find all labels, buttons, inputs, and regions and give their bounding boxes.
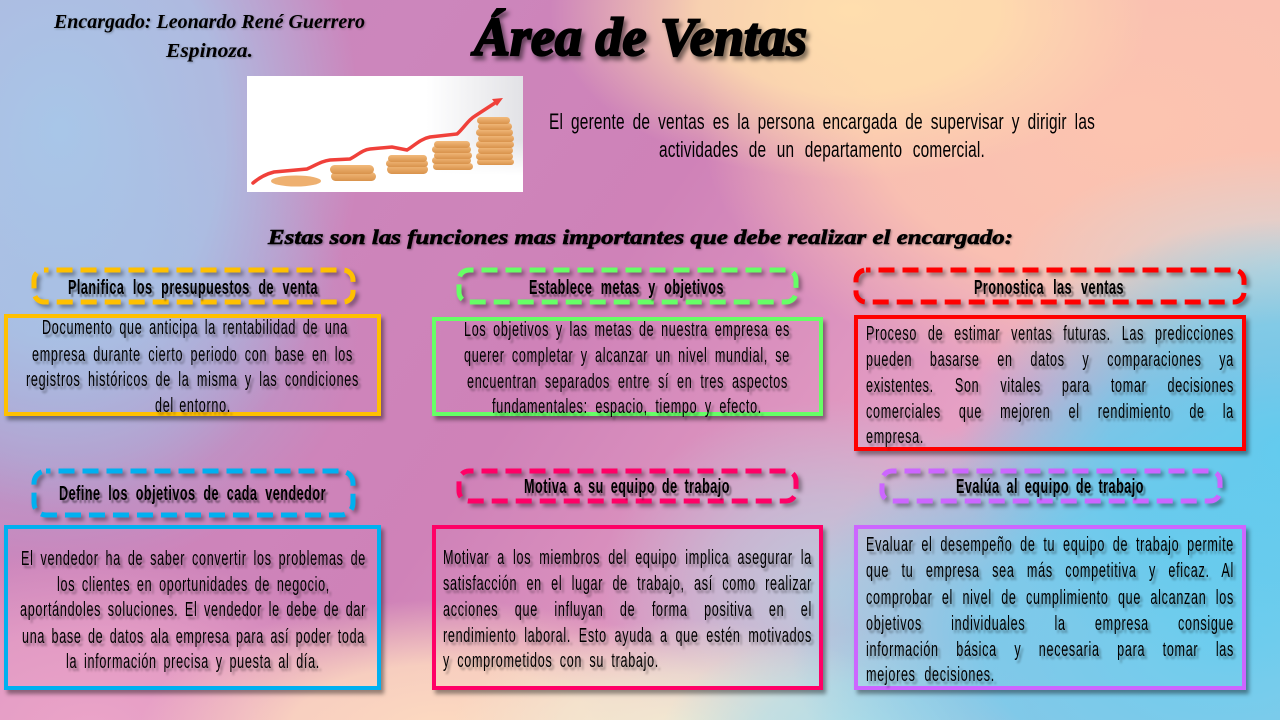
- panel: Planifica los presupuestos de venta: [4, 268, 386, 422]
- panel: Evalúa al equipo de trabajo: [854, 468, 1252, 697]
- heading: presupuestos: Planifica los presupuestos de venta: [68, 277, 318, 299]
- text box: pronostica: empresa.: [866, 426, 924, 448]
- panel: Motiva a su equipo de trabajo: [432, 468, 829, 697]
- intro text: actividades de un departamento comercial.: [659, 137, 985, 162]
- text box: vendedor: aportándoles soluciones. El vendedor le debe de dar: [20, 599, 366, 621]
- title: Área de Ventas: [471, 8, 807, 67]
- text box: pronostica: pueden basarse en datos y comparaciones ya: [866, 349, 1234, 371]
- author credit: [53, 11, 366, 64]
- text box: presupuestos: registros históricos de la misma y las condiciones: [26, 369, 359, 391]
- text box: evalúa: objetivos individuales la empresa consigue: [866, 613, 1234, 635]
- text box: presupuestos: empresa durante cierto periodo con base en los: [32, 344, 353, 366]
- text box: evalúa: comprobar el nivel de cumplimiento que alcanzan los: [866, 587, 1234, 609]
- text box: evalúa: Evaluar el desempeño de tu equipo de trabajo permite: [866, 534, 1234, 556]
- panel: Establece metas y objetivos: [432, 268, 828, 422]
- text box: vendedor: la información precisa y puesta al día.: [66, 651, 320, 673]
- text box: vendedor: una base de datos ala empresa para así poder toda: [22, 626, 365, 648]
- author credit: Encargado: Leonardo René Guerrero: [53, 11, 365, 33]
- text box: vendedor: [4, 525, 381, 690]
- subheading: Estas son las funciones mas importantes que debe realizar el encargado:: [267, 225, 1013, 249]
- heading: evalúa: Evalúa al equipo de trabajo: [956, 476, 1144, 498]
- text box: presupuestos: del entorno.: [155, 395, 231, 417]
- heading: pronostica: Pronostica las ventas: [974, 277, 1124, 299]
- text box: motiva: [432, 525, 823, 690]
- text box: motiva: rendimiento laboral. Esto ayuda a que estén motivados: [443, 625, 812, 647]
- text box: evalúa: mejores decisiones.: [866, 664, 995, 686]
- text box: metas: querer completar y alcanzar un nivel mundial, se: [464, 345, 790, 367]
- heading: evalúa: [880, 468, 1228, 510]
- panel: Define los objetivos de cada vendedor: [4, 468, 387, 697]
- heading: motiva: Motiva a su equipo de trabajo: [524, 476, 730, 498]
- image: coins and rising sales line: [247, 76, 523, 192]
- text box: metas: Los objetivos y las metas de nuestra empresa es: [464, 319, 790, 341]
- text box: motiva: y comprometidos con su trabajo.: [443, 650, 659, 672]
- author credit: Espinoza.: [165, 40, 253, 62]
- heading: vendedor: Define los objetivos de cada vendedor: [59, 483, 326, 505]
- text box: motiva: Motivar a los miembros del equipo implica asegurar la: [443, 547, 812, 569]
- heading: pronostica: [854, 268, 1252, 310]
- heading: metas: Establece metas y objetivos: [529, 277, 724, 299]
- text box: motiva: satisfacción en el lugar de trabajo, así como realizar: [443, 573, 812, 595]
- text box: metas: encuentran separados entre sí en tres aspectos: [467, 371, 788, 393]
- text box: metas: [432, 317, 823, 416]
- text box: pronostica: [854, 315, 1246, 451]
- text box: vendedor: El vendedor ha de saber convertir los problemas de: [21, 548, 366, 570]
- text box: motiva: acciones que influyan de forma positiva en el: [443, 599, 812, 621]
- text box: vendedor: los clientes en oportunidades de negocio,: [57, 574, 330, 596]
- heading: motiva: [456, 468, 804, 510]
- text box: pronostica: comerciales que mejoren el rendimiento de la: [866, 401, 1234, 423]
- text box: evalúa: [854, 525, 1246, 690]
- text box: metas: fundamentales: espacio, tiempo y efecto.: [492, 396, 762, 418]
- panel: Pronostica las ventas: [854, 268, 1252, 458]
- heading: vendedor: [32, 468, 362, 524]
- text box: evalúa: que tu empresa sea más competitiva y eficaz. Al: [866, 560, 1234, 582]
- intro text: El gerente de ventas es la persona encargada de supervisar y dirigir las: [549, 109, 1095, 134]
- heading: presupuestos: [32, 268, 361, 310]
- intro text: [549, 109, 1095, 162]
- heading: metas: [456, 268, 804, 310]
- text box: pronostica: Proceso de estimar ventas futuras. Las predicciones: [866, 323, 1234, 345]
- text box: evalúa: información básica y necesaria para tomar las: [866, 639, 1234, 661]
- text box: presupuestos: [4, 314, 381, 416]
- text box: pronostica: existentes. Son vitales para tomar decisiones: [866, 375, 1234, 397]
- text box: presupuestos: Documento que anticipa la rentabilidad de una: [42, 317, 348, 339]
